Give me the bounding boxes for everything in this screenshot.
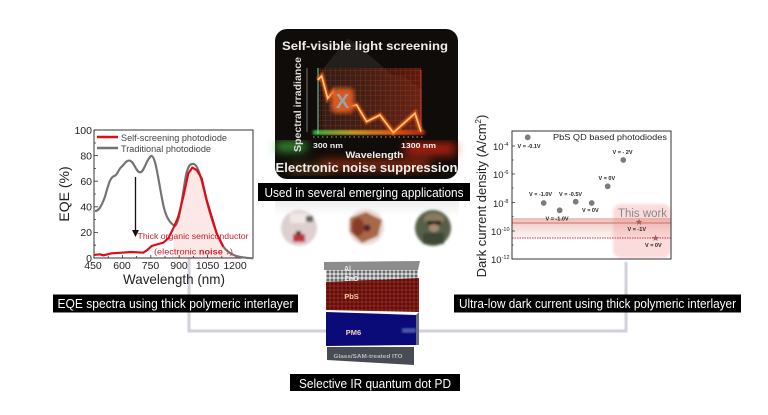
layer labels: Al [344, 266, 351, 273]
fade band under caption [275, 201, 459, 217]
x label: Wavelength [346, 150, 404, 161]
layer: PM6 [326, 312, 416, 346]
y tick labels [491, 142, 510, 266]
y tick labels: 40 [80, 202, 92, 214]
layer: PbS [326, 278, 419, 312]
legend [97, 133, 227, 154]
y tick labels: -8 [504, 199, 508, 205]
axes box [94, 130, 253, 258]
grid [318, 68, 421, 134]
y tick labels: -6 [504, 170, 508, 176]
bottom heading: Electronic noise suppression [276, 161, 458, 175]
shaded EQE peak area [172, 167, 238, 258]
arrow: downward [132, 177, 139, 237]
chart title: PbS QD based photodiodes [553, 132, 667, 142]
y axis title: ) [474, 115, 489, 119]
panel: EQE chart [56, 125, 253, 287]
voltage labels: V = -0.5V [559, 192, 582, 198]
band [512, 218, 671, 238]
y axis title: Dark current density (A/cm [474, 123, 489, 277]
panel: dark current chart [474, 115, 671, 277]
voltage labels: V = 0V [598, 176, 615, 182]
layer: glass [327, 347, 414, 365]
y tick labels: 10 [491, 255, 502, 266]
voltage labels: V = -0.1V [518, 144, 541, 150]
annotation: thick organic semiconductor: (electronic noise ↓) [154, 246, 233, 256]
panel: device stack [324, 261, 420, 365]
data points [525, 134, 626, 213]
this work stars: ★ [651, 233, 660, 243]
y tick labels: 10 [493, 142, 504, 153]
voltage labels: V = -1V [628, 227, 646, 233]
layer labels: Glass/SAM-treated ITO [334, 354, 403, 360]
X mark [331, 88, 354, 113]
y tick labels: -10 [502, 227, 510, 233]
y tick labels: 80 [80, 150, 92, 162]
y axis title: 2 [474, 118, 483, 123]
y tick labels: 100 [74, 125, 92, 137]
panel: self-visible light screening [275, 29, 458, 179]
y tick labels: -12 [502, 255, 510, 261]
axis ticks [94, 130, 236, 258]
x tick labels [84, 260, 247, 272]
X mark: X [336, 91, 350, 113]
caption: ultra-low dark current: Ultra-low dark current using thick polymeric interlayer [459, 297, 736, 311]
voltage labels: V = - 2V [612, 150, 633, 156]
y tick labels: 60 [80, 176, 92, 188]
caption: selective IR: Selective IR quantum dot PD [299, 377, 451, 391]
voltage labels: V = 0V [645, 243, 662, 249]
y tick labels: -4 [504, 142, 508, 148]
x tick labels: 1050 [196, 260, 219, 272]
this work stars [635, 217, 660, 243]
spectral side lines [307, 68, 423, 137]
photo: lab device [281, 210, 317, 246]
annotation: thick organic semiconductor: Thick organic semiconductor [138, 231, 249, 241]
range labels: 300 nm [313, 141, 343, 150]
y tick labels: 20 [80, 227, 92, 239]
self-screening photodiode curve [94, 168, 223, 255]
y axis title: EQE (%) [56, 166, 72, 222]
bottom glow [276, 143, 455, 173]
x tick labels: 450 [84, 260, 102, 272]
panel: self-visible light screening: 1300 nm [401, 141, 436, 150]
x tick labels: 600 [113, 260, 131, 272]
spectrum curve glow [318, 76, 421, 133]
y tick labels: 10 [491, 227, 502, 238]
photo: soldier [415, 210, 451, 246]
voltage labels: V = 0V [582, 208, 599, 214]
layer: Al [324, 261, 420, 270]
reference lines [512, 222, 671, 224]
this work highlight [613, 204, 671, 258]
annotation: thick organic semiconductor [138, 231, 249, 256]
backdrop mountain silhouette [322, 38, 422, 135]
traditional photodiode curve [95, 156, 253, 258]
legend: Self-screening photodiode [121, 133, 227, 143]
voltage labels: V = -1.0V [529, 192, 552, 198]
x tick labels: 750 [142, 260, 159, 272]
axes box [512, 131, 671, 259]
layer labels: ZnO [344, 276, 359, 283]
y tick labels: 10 [493, 170, 504, 181]
panel heading: Self-visible light screening [282, 39, 448, 53]
x tick labels: 900 [170, 260, 188, 272]
caption: applications: Used in several emerging applications [264, 186, 464, 200]
voltage labels [518, 144, 662, 249]
icon: application photos [281, 209, 451, 246]
x tick labels: 1200 [223, 260, 247, 272]
layer: ZnO [326, 270, 418, 282]
y tick labels: 0 [86, 253, 92, 265]
spectrum curve [318, 76, 421, 133]
voltage labels: V = -1.0V [546, 216, 569, 222]
this work label: This work [618, 208, 667, 220]
caption: EQE spectra: EQE spectra using thick polymeric interlayer [58, 297, 294, 311]
axis ticks [512, 146, 515, 259]
this work stars: ★ [635, 217, 643, 227]
layer labels: PM6 [346, 328, 361, 337]
photo: hand with sensor [348, 209, 384, 245]
y tick labels: 10 [493, 199, 504, 210]
y label: Spectral irradiance [293, 57, 304, 152]
spectrum floor [313, 130, 425, 135]
y tick labels [74, 125, 92, 265]
legend: Traditional photodiode [121, 144, 211, 154]
connector lines [189, 258, 626, 331]
layer labels [334, 266, 403, 360]
x axis title: Wavelength (nm) [123, 271, 225, 287]
layer labels: PbS [344, 292, 359, 301]
